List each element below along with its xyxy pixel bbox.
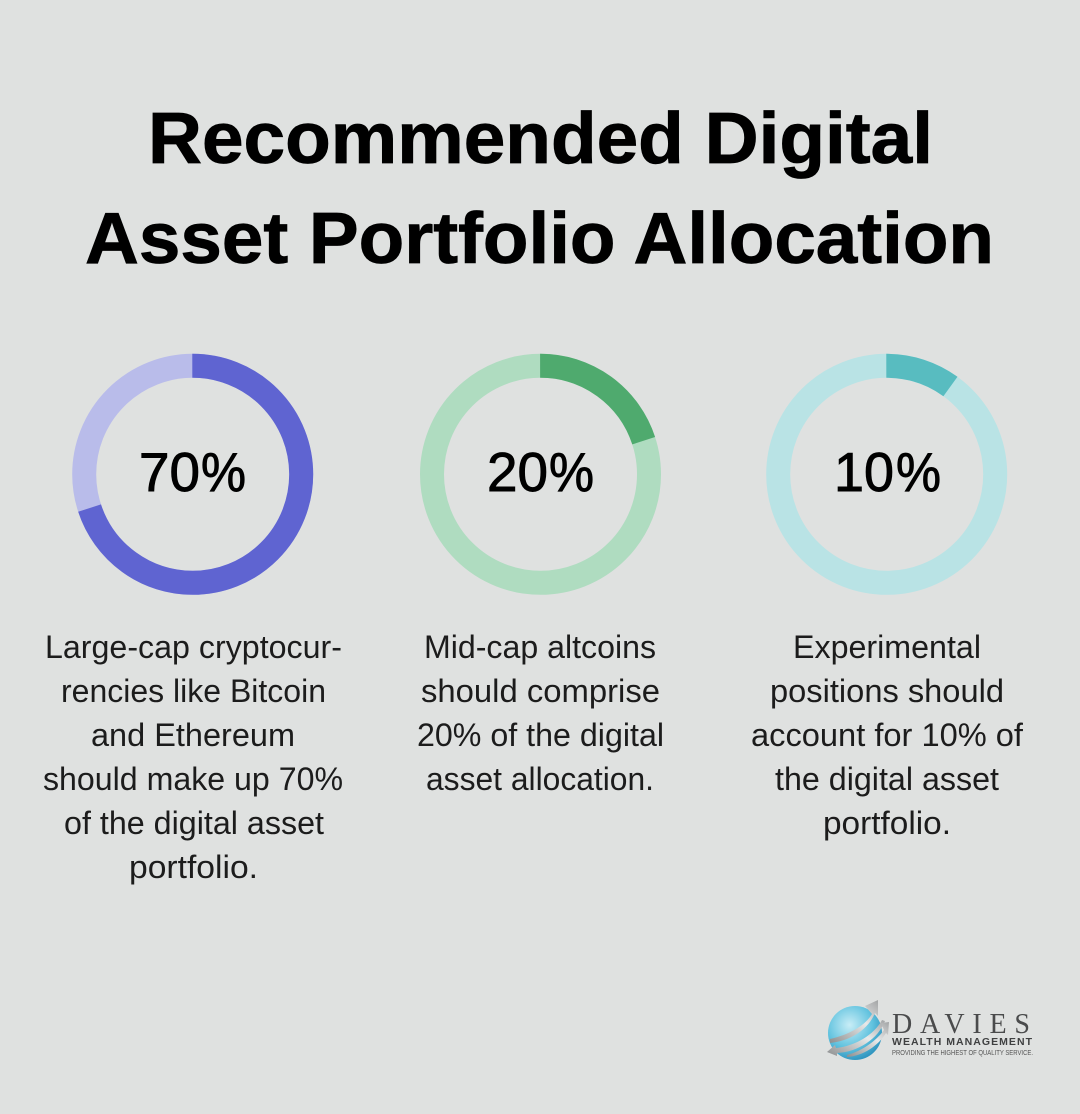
donut chart: 70% xyxy=(84,366,301,583)
text block: large-cap description: Large-cap cryptocur- xyxy=(45,629,342,665)
title xyxy=(85,99,994,279)
text block: large-cap description: should make up 70% xyxy=(43,761,343,797)
panel: 20% mid-cap xyxy=(417,366,664,797)
text block: large-cap description: and Ethereum xyxy=(91,717,295,753)
donut chart: 10%: % xyxy=(896,441,941,503)
donut chart: 70%: 70 xyxy=(139,441,200,503)
text block: large-cap description: portfolio. xyxy=(129,849,258,885)
text block: mid-cap description: should comprise xyxy=(421,673,660,709)
donut chart: 20%: 20 xyxy=(487,441,548,503)
logo wordmark: WEALTH MANAGEMENT xyxy=(892,1036,1033,1048)
donut chart: 10% xyxy=(778,366,995,583)
text block: experimental description: portfolio. xyxy=(823,805,951,841)
text block: mid-cap description: 20% of the digital xyxy=(417,717,664,753)
text block: experimental description: account for 10% of xyxy=(751,717,1023,753)
donut chart: 20%: % xyxy=(549,441,594,503)
panel: 70% large-cap xyxy=(43,366,343,885)
text block: experimental description: Experimental xyxy=(793,629,981,665)
text block: experimental description xyxy=(751,629,1023,841)
logo wordmark xyxy=(892,1009,1033,1057)
text block: large-cap description: rencies like Bitcoin xyxy=(61,673,326,709)
text block: mid-cap description: Mid-cap altcoins xyxy=(424,629,656,665)
panel: 10% experimental xyxy=(751,366,1023,841)
text block: large-cap description: of the digital asset xyxy=(64,805,324,841)
logo: Davies Wealth Management xyxy=(827,1000,1033,1060)
text block: mid-cap description: asset allocation. xyxy=(426,761,654,797)
logo wordmark: PROVIDING THE HIGHEST OF QUALITY SERVICE. xyxy=(892,1048,1033,1057)
title: Recommended Digital xyxy=(148,99,933,179)
donut chart: 10%: 10 xyxy=(834,441,894,503)
text block: experimental description: the digital asset xyxy=(775,761,999,797)
title: Asset Portfolio Allocation xyxy=(85,199,994,279)
text block: experimental description: positions should xyxy=(770,673,1004,709)
donut chart: 20% xyxy=(432,366,649,583)
donut chart: 70%: % xyxy=(201,441,246,503)
logo wordmark: DAVIES xyxy=(892,1009,1030,1040)
text block: mid-cap description xyxy=(417,629,664,797)
icon: globe with arrows xyxy=(827,1000,889,1060)
text block: large-cap description xyxy=(43,629,343,885)
